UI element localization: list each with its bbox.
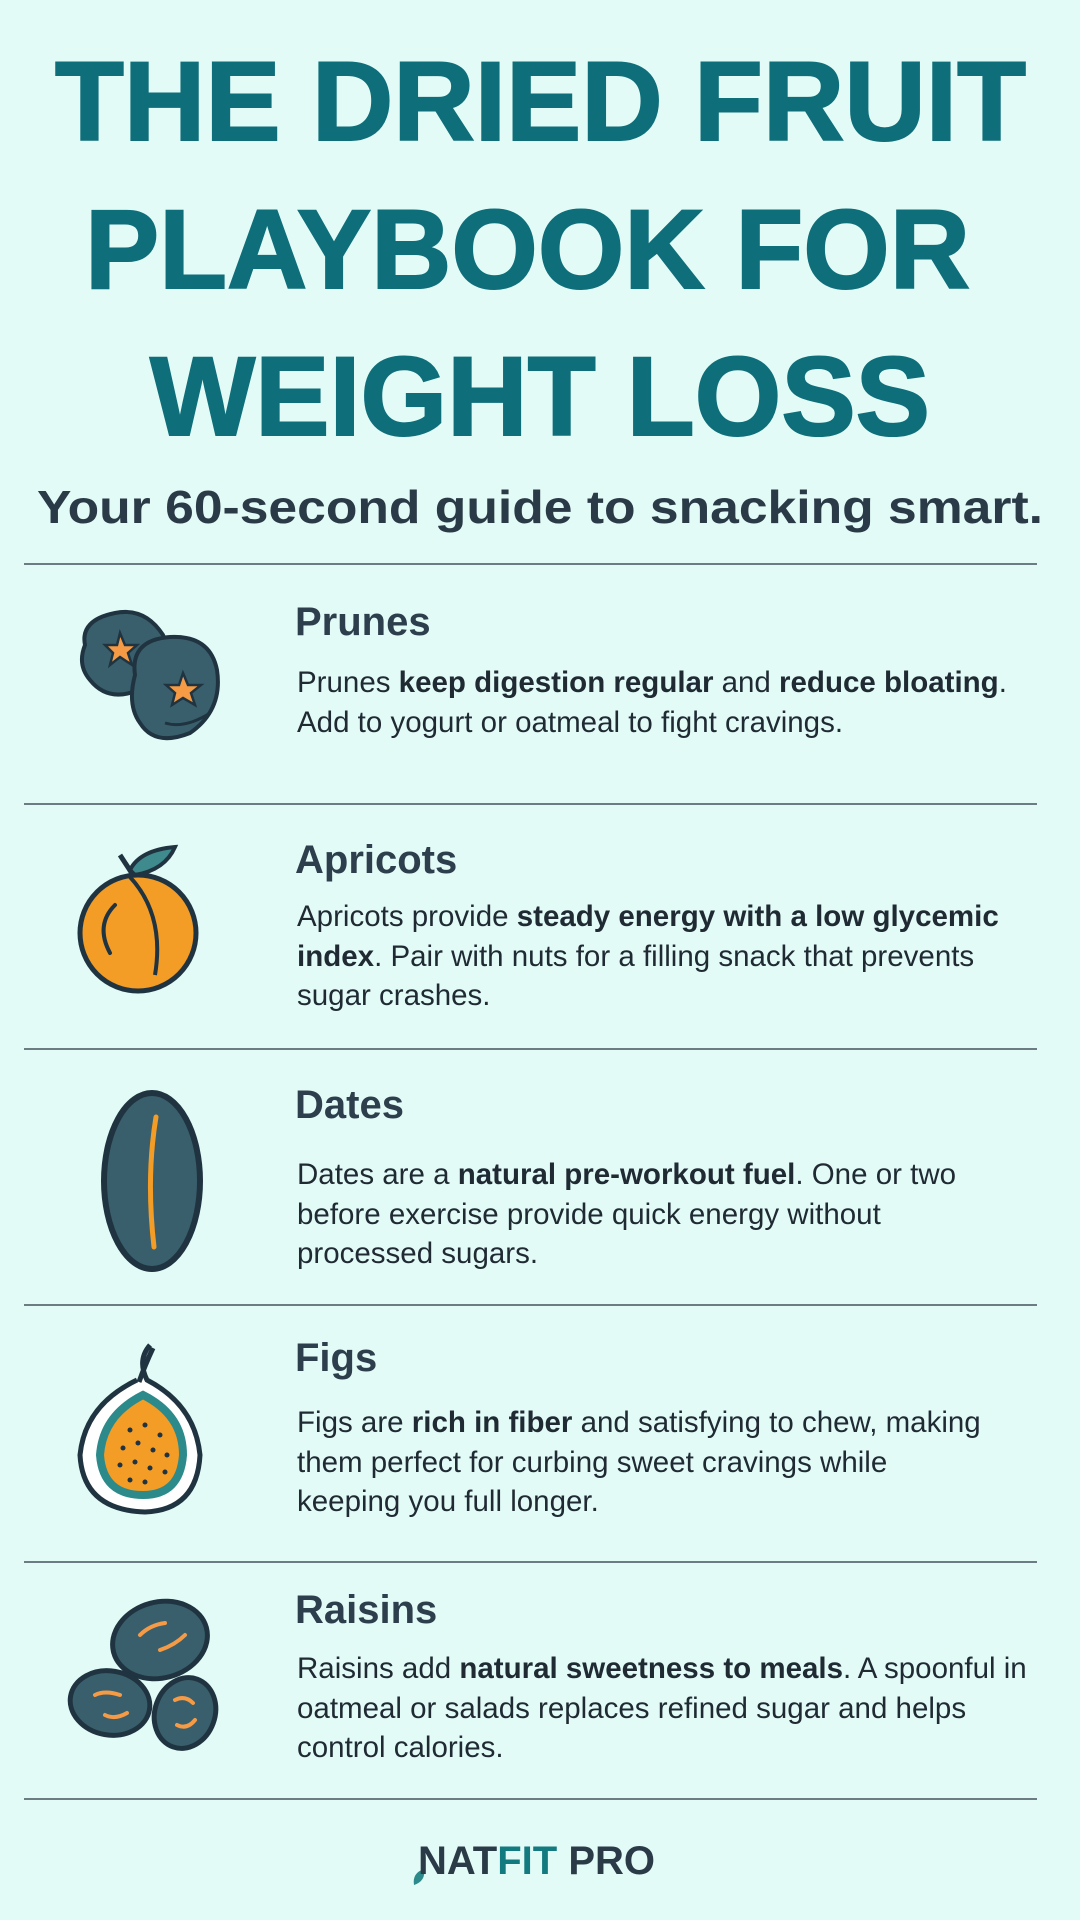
heading: dates: Dates [295,1083,404,1127]
text: prunes [297,666,1007,738]
text: apricots [297,900,999,1012]
icon: apricot [78,844,198,994]
text: dates [297,1158,956,1270]
icon: fig [78,1343,202,1514]
text: dates: processed sugars. [297,1237,538,1270]
heading: raisins: Raisins [295,1588,437,1632]
icon: prunes [80,610,220,740]
heading: apricots: Apricots [295,838,457,882]
logo: NATFIT PRO [418,1839,655,1883]
title [55,39,1026,450]
text: figs: keeping you full longer. [297,1485,599,1518]
text: raisins: control calories. [297,1731,504,1764]
text: figs [297,1406,981,1518]
text: dates: before exercise provide quick energy without [297,1198,881,1230]
text: dates: Dates are a natural pre-workout fuel. One or two [297,1158,956,1191]
text: prunes: Prunes keep digestion regular and reduce bloating. [297,666,1007,699]
text: figs: them perfect for curbing sweet cravings while [297,1446,887,1478]
subtitle: Your 60-second guide to snacking smart. [37,481,1043,533]
text: prunes: Add to yogurt or oatmeal to fight cravings. [297,706,843,738]
text: apricots: Apricots provide steady energy with a low glycemic [297,900,999,933]
heading: figs: Figs [295,1336,377,1380]
text: figs: Figs are rich in fiber and satisfying to chew, making [297,1406,981,1439]
title: THE DRIED FRUIT [55,39,1026,164]
heading: prunes: Prunes [295,600,431,644]
text: raisins: Raisins add natural sweetness to meals. A spoonful in [297,1652,1027,1685]
text: raisins: oatmeal or salads replaces refined sugar and helps [297,1692,966,1724]
text: apricots: index. Pair with nuts for a filling snack that prevents [297,940,974,972]
icon: raisins [68,1598,218,1751]
text: raisins [297,1652,1027,1764]
text: apricots: sugar crashes. [297,979,490,1012]
icon: date [101,1090,203,1272]
title: PLAYBOOK FOR [85,187,970,312]
